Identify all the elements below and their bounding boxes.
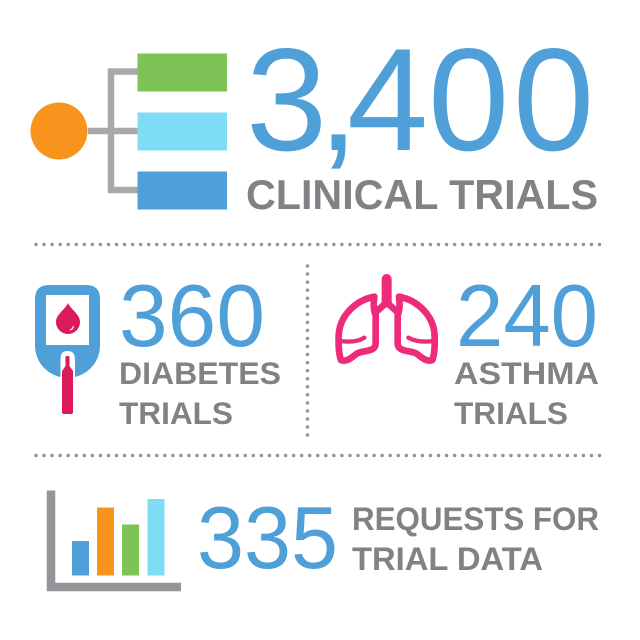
- number: 240: 240: [456, 266, 598, 365]
- icon: glucose meter: [35, 285, 100, 414]
- panel: diabetes trials: [35, 266, 281, 431]
- panel: asthma trials: [339, 266, 599, 431]
- label: diabetes trials: [119, 355, 281, 431]
- label: asthma trials: [454, 355, 599, 431]
- label: asthma trials: ASTHMA: [454, 355, 599, 391]
- label: requests for trial data: REQUESTS FOR: [352, 501, 599, 537]
- label: diabetes trials: DIABETES: [119, 355, 281, 391]
- icon: lungs: [339, 279, 435, 361]
- label: requests for trial data: TRIAL DATA: [352, 541, 543, 577]
- number: 3,400: 3,400: [246, 18, 594, 181]
- panel: clinical trials: [30, 18, 598, 218]
- label: clinical trials: CLINICAL TRIALS: [246, 171, 598, 218]
- label: diabetes trials: TRIALS: [119, 395, 233, 431]
- number: 360: 360: [119, 266, 265, 365]
- label: asthma trials: TRIALS: [454, 395, 568, 431]
- icon: tree diagram: [30, 54, 227, 210]
- number: 335: 335: [197, 488, 338, 587]
- panel: data requests: [51, 488, 599, 587]
- label: requests for trial data: [352, 501, 599, 577]
- icon: bar chart: [51, 490, 181, 587]
